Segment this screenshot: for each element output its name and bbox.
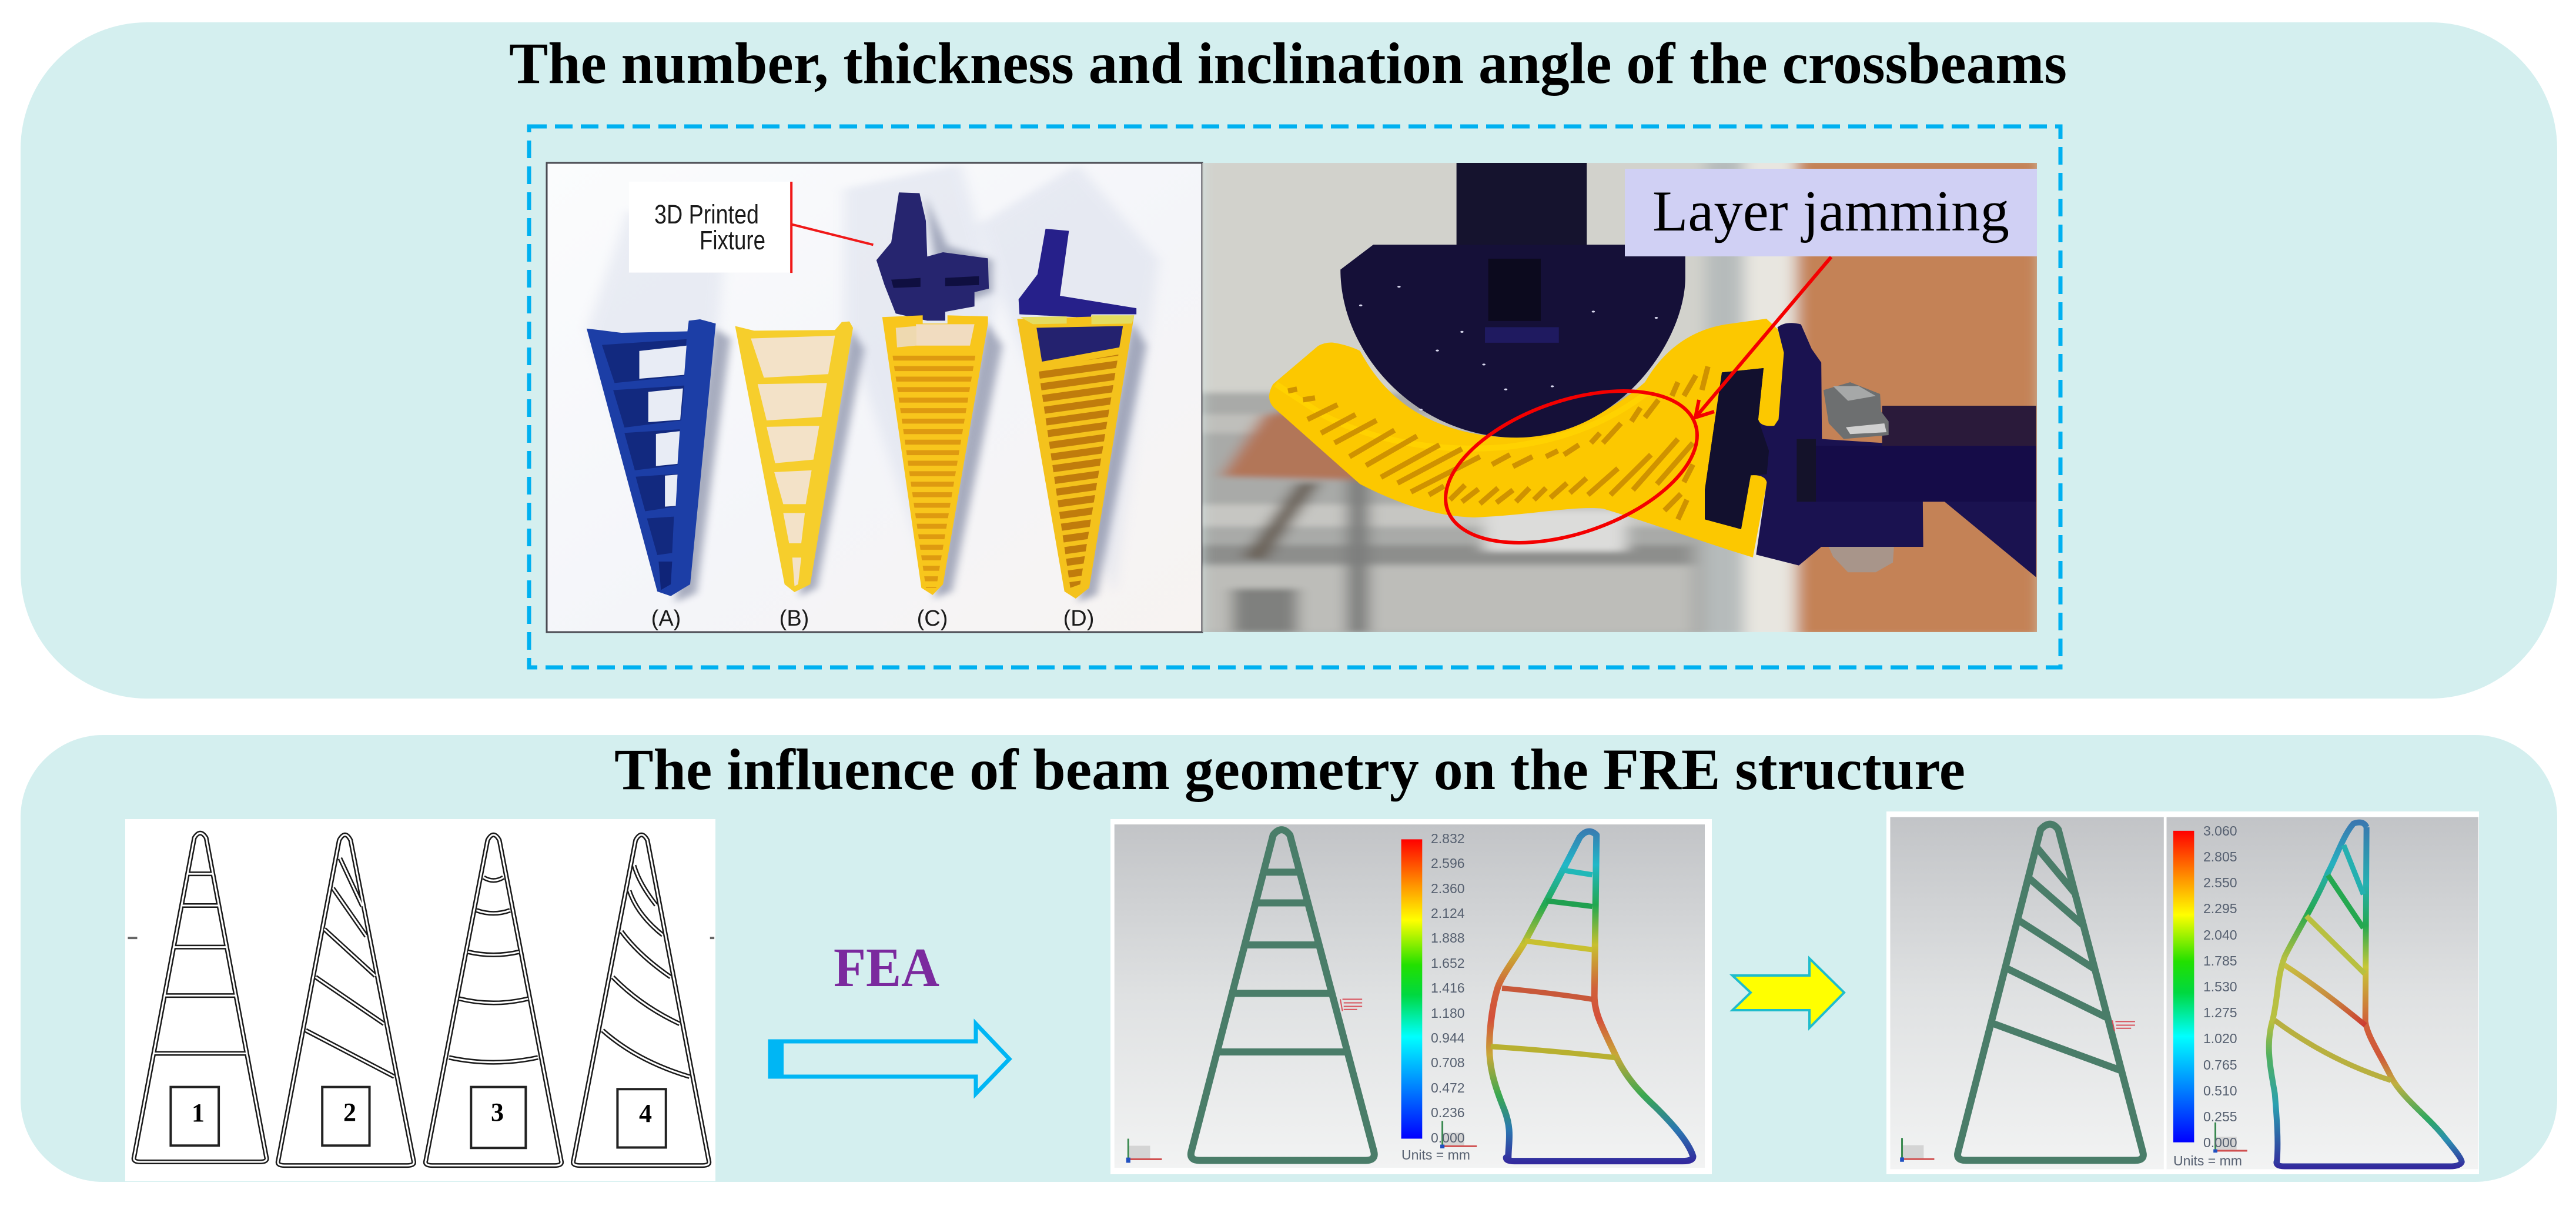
specimen A blue: [587, 319, 716, 596]
specimen letters: (B): [780, 606, 809, 631]
colour scale values: 2.832: [1431, 831, 1465, 846]
red ellipse highlight: [1444, 389, 1699, 544]
specimen letters: (D): [1063, 606, 1094, 631]
blurred lab background: [1199, 159, 2042, 635]
specimen letters: (C): [917, 606, 948, 631]
colour scale values: 0.510: [2203, 1083, 2237, 1098]
label box: [1625, 169, 2038, 256]
design 1 straight beams: [134, 833, 267, 1162]
colour scale: [1401, 839, 1422, 1138]
colour scale values: 1.888: [1431, 930, 1465, 946]
red leader line: [791, 182, 873, 273]
dark blue indenter: [1340, 162, 1685, 437]
axis triad left: [1126, 1138, 1162, 1162]
colour scale values: 2.360: [1431, 881, 1465, 896]
undeformed mesh: [1958, 824, 2143, 1160]
deformed shape: [1490, 831, 1693, 1161]
colour scale values: 0.708: [1431, 1055, 1465, 1070]
colour scale values: 1.785: [2203, 953, 2237, 968]
label: 3D Printed Fixture: Fixture: [700, 225, 765, 255]
photo: bending test with layer jamming: [1199, 159, 2042, 635]
deformed right edge: [2276, 827, 2462, 1167]
title: beam geometry: The influence of beam geometry on the FRE structure: [614, 737, 1965, 802]
photo: printed specimens A to D: [547, 163, 1202, 632]
colour scale values: 1.020: [2203, 1031, 2237, 1046]
colour scale values: [2173, 823, 2242, 1168]
colour scale values: Units = mm: [1401, 1147, 1470, 1162]
design 4 inclined arched beams: [573, 835, 709, 1165]
colour scale values: 1.180: [1431, 1005, 1465, 1021]
label: 3D Printed Fixture: 3D Printed: [654, 199, 759, 229]
figure: FEA result inclined beams: [1886, 811, 2479, 1174]
axis triad right: [2213, 1123, 2247, 1152]
colour scale values: Units = mm: [2173, 1153, 2242, 1168]
deformed beams: [2275, 845, 2391, 1080]
colour scale values: 1.416: [1431, 980, 1465, 995]
figure: FEA result straight beams: [1110, 819, 1712, 1174]
colour scale values: 0.944: [1431, 1030, 1465, 1045]
axis triad right: [1440, 1121, 1477, 1148]
load marks: [1340, 999, 1362, 1011]
deformed beams: [1491, 870, 1615, 1058]
colour scale values: 2.040: [2203, 927, 2237, 943]
undeformed mesh: [1191, 830, 1374, 1160]
colour scale values: 3.060: [2203, 823, 2237, 838]
colour scale values: 2.124: [1431, 906, 1465, 921]
arrow: to FEA results: [768, 1024, 1009, 1094]
design numbers: 4: [639, 1099, 652, 1128]
panel: crossbeams: [21, 22, 2557, 699]
colour scale: [2173, 831, 2194, 1142]
colour scale values: 1.530: [2203, 979, 2237, 994]
specimen B yellow: [735, 322, 853, 592]
colour scale values: 2.295: [2203, 901, 2237, 916]
yellow bent specimen: [1269, 319, 1784, 557]
label: 3D Printed Fixture: [655, 204, 764, 249]
axis triad left: [1900, 1138, 1934, 1162]
label: FEA: FEA: [834, 937, 939, 998]
dashed frame around photos: [529, 126, 2060, 667]
photo border: [547, 163, 1202, 632]
specimen D with fixture: [1017, 229, 1136, 599]
panel: beam geometry: [21, 735, 2557, 1182]
label: Layer jamming: Layer jamming: [1652, 179, 2009, 243]
design 2 inclined beams: [278, 835, 414, 1165]
specimen C with fixture: [876, 192, 989, 595]
colour scale values: 1.275: [2203, 1005, 2237, 1020]
colour scale values: 2.805: [2203, 849, 2237, 864]
design numbers: 2: [343, 1098, 356, 1127]
colour scale values: [1401, 831, 1470, 1162]
colour scale values: 0.765: [2203, 1057, 2237, 1073]
red arrow: [1695, 257, 1831, 417]
colour scale values: 1.652: [1431, 956, 1465, 971]
load marks: [2112, 1020, 2135, 1031]
colour scale values: 0.000: [2203, 1135, 2237, 1150]
specimen letters: (A): [651, 606, 681, 631]
colour scale values: 0.472: [1431, 1080, 1465, 1095]
deformed left edge: [2269, 823, 2367, 1163]
design numbers: 1: [192, 1098, 205, 1127]
design 3 arched beams: [426, 835, 561, 1165]
colour scale values: 2.550: [2203, 875, 2237, 890]
design numbers: [192, 1098, 652, 1128]
colour scale values: 2.596: [1431, 856, 1465, 871]
title: crossbeams: The number, thickness and inclination angle of the crossbeams: [509, 31, 2067, 96]
specimen letters: [653, 609, 1093, 630]
clamp and bolt: [1705, 323, 2036, 577]
rib slots: [1288, 366, 1708, 519]
figure: four beam designs: [125, 819, 715, 1181]
number boxes and ticks: [128, 938, 714, 1148]
colour scale values: 0.255: [2203, 1109, 2237, 1124]
design numbers: 3: [491, 1098, 504, 1127]
arrow: yellow: [1732, 958, 1844, 1028]
fixture label box: [629, 208, 737, 273]
colour scale values: 0.000: [1431, 1130, 1465, 1145]
colour scale values: 0.236: [1431, 1105, 1465, 1120]
